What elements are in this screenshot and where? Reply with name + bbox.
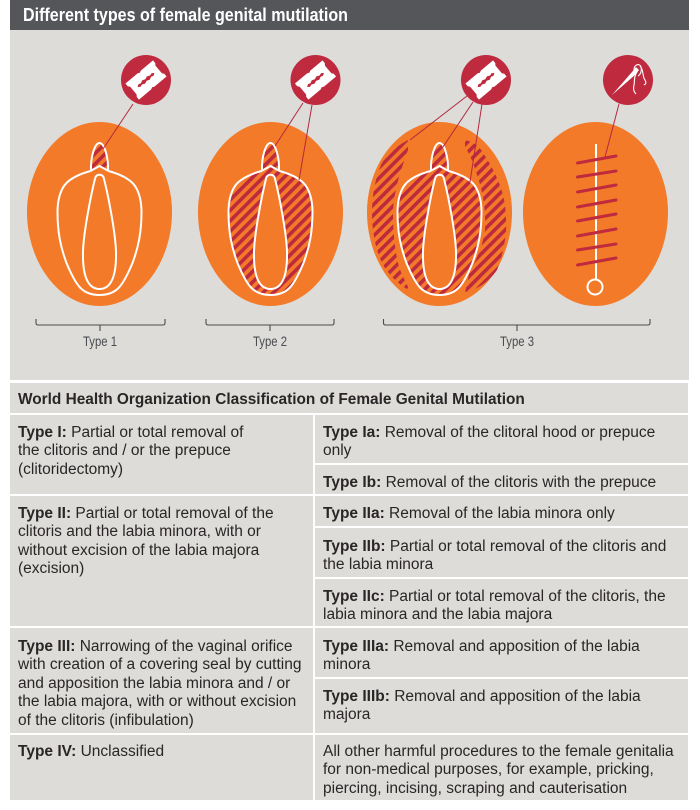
icon: razor blade (461, 55, 511, 105)
table cell: type IIIb: Type IIIb: Removal and apposition of the labia (323, 688, 641, 705)
table cell: type IV description: All other harmful procedures to the female genitalia (323, 743, 674, 760)
table cell: type IV description: for non-medical purposes, for example, pricking, (323, 761, 654, 778)
diagram: type 3 excision (367, 55, 512, 306)
table cell: type IIa: Type IIa: Removal of the labia minora only (323, 505, 615, 522)
table row: type II (10, 496, 313, 626)
table row: type I (10, 415, 313, 494)
table row: type II: Type II: Partial or total removal of the (18, 505, 274, 522)
table cell: type IIc: labia minora and the labia majora (323, 606, 552, 623)
table row: type III: Type III: Narrowing of the vaginal orifice (18, 638, 293, 655)
table row: type II: (excision) (18, 560, 84, 577)
illustration panel (10, 0, 689, 380)
table cell: type Ia: Type Ia: Removal of the clitoral hood or prepuce (323, 424, 655, 441)
table cell: type IIb: the labia minora (323, 556, 433, 573)
table row: type II: without excision of the labia majora (18, 542, 259, 559)
table heading: World Health Organization Classification of Female Genital Mutilation (18, 391, 525, 408)
icon: razor blade (290, 55, 340, 105)
diagram: type 2 (198, 55, 343, 306)
table row: type IV: Type IV: Unclassified (18, 743, 164, 760)
table cell: type Ib: Type Ib: Removal of the clitoris with the prepuce (323, 474, 656, 491)
table row: type II: clitoris and the labia minora, with or (18, 523, 261, 540)
table cell: type IIIa: minora (323, 656, 370, 673)
table cell: type Ia (315, 415, 688, 463)
icon: needle and thread (603, 55, 653, 105)
table row: type III: the labia majora, with or without excision (18, 693, 296, 710)
table cell: type IIc (315, 579, 688, 626)
table cell: type IIc: Type IIc: Partial or total removal of the clitoris, the (323, 588, 666, 605)
table row: type I: Type I: Partial or total removal of (18, 424, 243, 441)
bracket: type 3: Type 3 (500, 333, 534, 349)
table row: type III (10, 628, 313, 733)
bracket: type 1: Type 1 (83, 333, 117, 349)
table cell: type IIb: Type IIb: Partial or total removal of the clitoris and (323, 538, 666, 555)
icon: razor blade (121, 55, 171, 105)
title bar (10, 0, 689, 30)
table row: type III: and apposition the labia minora and / or (18, 675, 290, 692)
table row: type I: (clitoridectomy) (18, 461, 123, 478)
table cell: type IIa (315, 496, 688, 526)
table cell: type IIb (315, 528, 688, 577)
table cell: type IV description: piercing, incising, scraping and cauterisation (323, 780, 627, 797)
diagram: type 3 infibulation (523, 55, 668, 306)
title bar: Different types of female genital mutilation (23, 5, 348, 25)
table cell: type Ib (315, 465, 688, 494)
bracket: type 2: Type 2 (253, 333, 287, 349)
table cell: type IIIa: Type IIIa: Removal and apposition of the labia (323, 638, 640, 655)
table cell: type IIIb: majora (323, 706, 370, 723)
bracket: type 3 (384, 319, 650, 349)
table cell: type Ia: only (323, 442, 351, 459)
table cell: type IIIb (315, 679, 688, 733)
table cell: type IV description (315, 735, 688, 800)
table row: type III: of the clitoris (infibulation) (18, 712, 194, 729)
table row: type I: the clitoris and / or the prepuce (18, 442, 231, 459)
bracket: type 2 (206, 319, 334, 349)
bracket: type 1 (36, 319, 165, 349)
table heading (10, 383, 688, 413)
table row: type IV (10, 735, 313, 800)
diagram: type 1 (27, 55, 172, 306)
table cell: type IIIa (315, 628, 688, 677)
table row: type III: with creation of a covering seal by cutting (18, 656, 301, 673)
